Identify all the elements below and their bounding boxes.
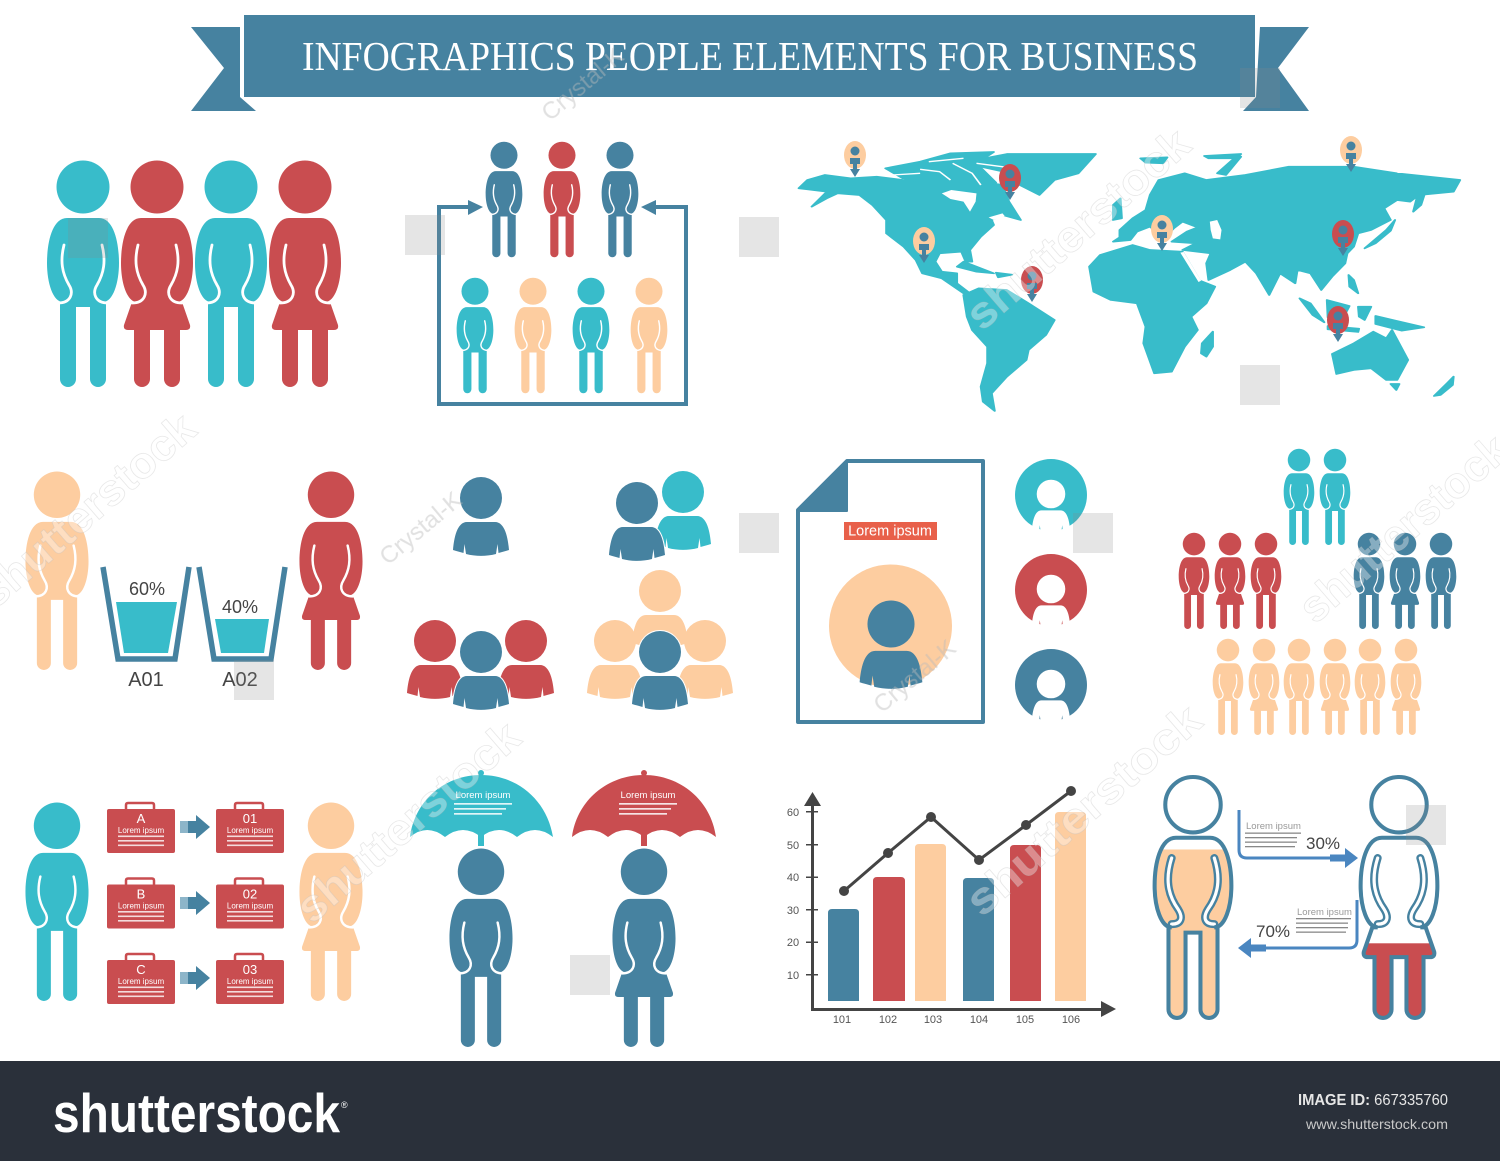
registered mark: ® [341, 1100, 348, 1110]
heading: INFOGRAPHICS PEOPLE ELEMENTS FOR BUSINESS [302, 33, 1198, 79]
briefcase A [107, 803, 175, 853]
man teal [47, 160, 119, 387]
text block 70 percent: 70% [1256, 922, 1290, 941]
glass A01: A01 [128, 669, 164, 691]
world map [799, 152, 1460, 411]
y axis labels: 40 [787, 872, 799, 884]
pin peach, USA [913, 227, 935, 263]
panel: water glasses comparison [25, 472, 363, 691]
glass A02: A02 [222, 669, 258, 691]
four busts [587, 570, 733, 710]
trend line [839, 786, 1076, 896]
frame with arrows [439, 200, 686, 404]
footer logo: shutterstock [53, 1082, 340, 1144]
woman blue [612, 849, 676, 1047]
image id: IMAGE ID: 667335760 [1298, 1092, 1448, 1109]
panel: briefcases flow [25, 803, 363, 1004]
teal pair [1284, 449, 1350, 545]
text block 70 percent [1256, 907, 1352, 941]
briefcase B: Lorem ipsum [118, 902, 164, 910]
woman peach [299, 803, 363, 1001]
briefcase 02 [216, 878, 284, 928]
text block 70 percent: Lorem ipsum [1297, 907, 1352, 918]
folded corner [798, 461, 847, 511]
watermark author names: Crystal-K [869, 634, 961, 719]
two busts [609, 471, 711, 561]
footer bar [0, 1061, 1500, 1161]
umbrella red: Lorem ipsum [621, 790, 676, 801]
umbrella teal: Lorem ipsum [456, 790, 511, 801]
woman red [269, 160, 341, 387]
arrow [180, 815, 210, 839]
pin red, Atlantic [1021, 266, 1043, 302]
briefcase 03: 03 [243, 962, 257, 977]
avatar teal [1015, 459, 1087, 533]
y axis labels: 10 [787, 970, 799, 982]
briefcase 01: Lorem ipsum [227, 826, 273, 835]
arrow 70 percent [1238, 900, 1357, 958]
briefcase A: Lorem ipsum [118, 826, 164, 835]
briefcase B: B [137, 886, 145, 902]
text block 30 percent [1245, 821, 1340, 853]
x axis labels [833, 1014, 1080, 1026]
portrait [829, 564, 952, 689]
watermark author names: Crystal-K [375, 486, 467, 571]
y axis labels: 30 [787, 905, 799, 917]
man teal [195, 160, 267, 387]
briefcase B [107, 878, 175, 928]
red trio [1179, 533, 1281, 629]
blue trio [1354, 533, 1456, 629]
pin peach, Siberia [1340, 136, 1362, 172]
watermark wordmarks [0, 119, 1500, 933]
y axis labels: 60 [787, 807, 799, 819]
panel: bust groups [407, 471, 733, 710]
outline woman [1356, 777, 1442, 1020]
watermark author names [375, 42, 961, 719]
website: www.shutterstock.com [1305, 1116, 1448, 1132]
briefcase C: Lorem ipsum [118, 977, 164, 986]
pin red, Indonesia [1327, 306, 1349, 342]
label: Lorem ipsum [848, 524, 932, 540]
x axis labels: 106 [1062, 1014, 1080, 1026]
glass A01 [103, 567, 189, 691]
watermark squares [68, 68, 1446, 995]
glass A01: 60% [129, 579, 165, 599]
briefcase 03 [216, 954, 284, 1004]
briefcase 01 [216, 803, 284, 853]
arrow [180, 966, 210, 990]
briefcase 01: 01 [243, 811, 257, 826]
bottom row of people [457, 278, 667, 393]
pin peach, Alaska [844, 141, 866, 177]
top row of people [486, 142, 638, 257]
pin red, Canada [999, 164, 1021, 200]
y axis labels: 20 [787, 937, 799, 949]
watermark wordmarks: shutterstock [956, 695, 1212, 926]
briefcase A: A [137, 811, 146, 826]
woman red [121, 160, 193, 387]
three busts [407, 620, 554, 710]
avatar red [1015, 554, 1087, 628]
x axis labels: 104 [970, 1014, 988, 1026]
panel: outline people percent exchange [1150, 777, 1442, 1020]
bars [828, 812, 1086, 1001]
man peach [25, 472, 89, 670]
ribbon right tail [1243, 27, 1309, 111]
panel: bar and line chart [787, 786, 1116, 1026]
single bust [453, 477, 509, 556]
x axis labels: 102 [879, 1014, 897, 1026]
watermark author names: Crystal-K [537, 42, 629, 127]
ribbon left tail [191, 27, 256, 111]
text block 30 percent: Lorem ipsum [1246, 821, 1301, 832]
ribbon body [244, 15, 1255, 97]
briefcase 02: 02 [243, 886, 257, 902]
umbrella red [572, 770, 716, 846]
man teal [25, 803, 89, 1001]
peach six [1213, 639, 1421, 735]
outline man [1150, 777, 1236, 1020]
x axis labels: 101 [833, 1014, 851, 1026]
x axis labels: 105 [1016, 1014, 1034, 1026]
title banner [191, 15, 1309, 111]
panel: promotion frame with people [439, 142, 686, 404]
pin red, China [1332, 220, 1354, 256]
briefcase 02: Lorem ipsum [227, 902, 273, 910]
briefcase C [107, 954, 175, 1004]
axes [804, 792, 1116, 1017]
y axis labels [787, 807, 799, 982]
watermark wordmarks: shutterstock [286, 712, 530, 933]
document outline [798, 461, 983, 722]
panel: avatar circles [1015, 459, 1087, 723]
panel: four large people [47, 160, 341, 387]
woman red [299, 472, 363, 670]
panel: people groups [1179, 449, 1456, 735]
umbrella teal [410, 770, 553, 846]
man blue [449, 849, 513, 1047]
pin peach, Europe [1151, 215, 1173, 251]
panel: umbrellas [410, 770, 716, 1047]
arrow 30 percent [1239, 810, 1358, 868]
arrow [180, 891, 210, 915]
y axis labels: 50 [787, 840, 799, 852]
panel: world map with pins [799, 136, 1460, 411]
glass A02 [199, 567, 285, 691]
text block 30 percent: 30% [1306, 834, 1340, 853]
x axis labels: 103 [924, 1014, 942, 1026]
watermark wordmarks: shutterstock [956, 119, 1200, 340]
panel: profile document [798, 461, 983, 722]
briefcase C: C [136, 962, 146, 977]
glass A02: 40% [222, 597, 258, 617]
briefcase 03: Lorem ipsum [227, 977, 273, 986]
avatar blue [1015, 649, 1087, 723]
